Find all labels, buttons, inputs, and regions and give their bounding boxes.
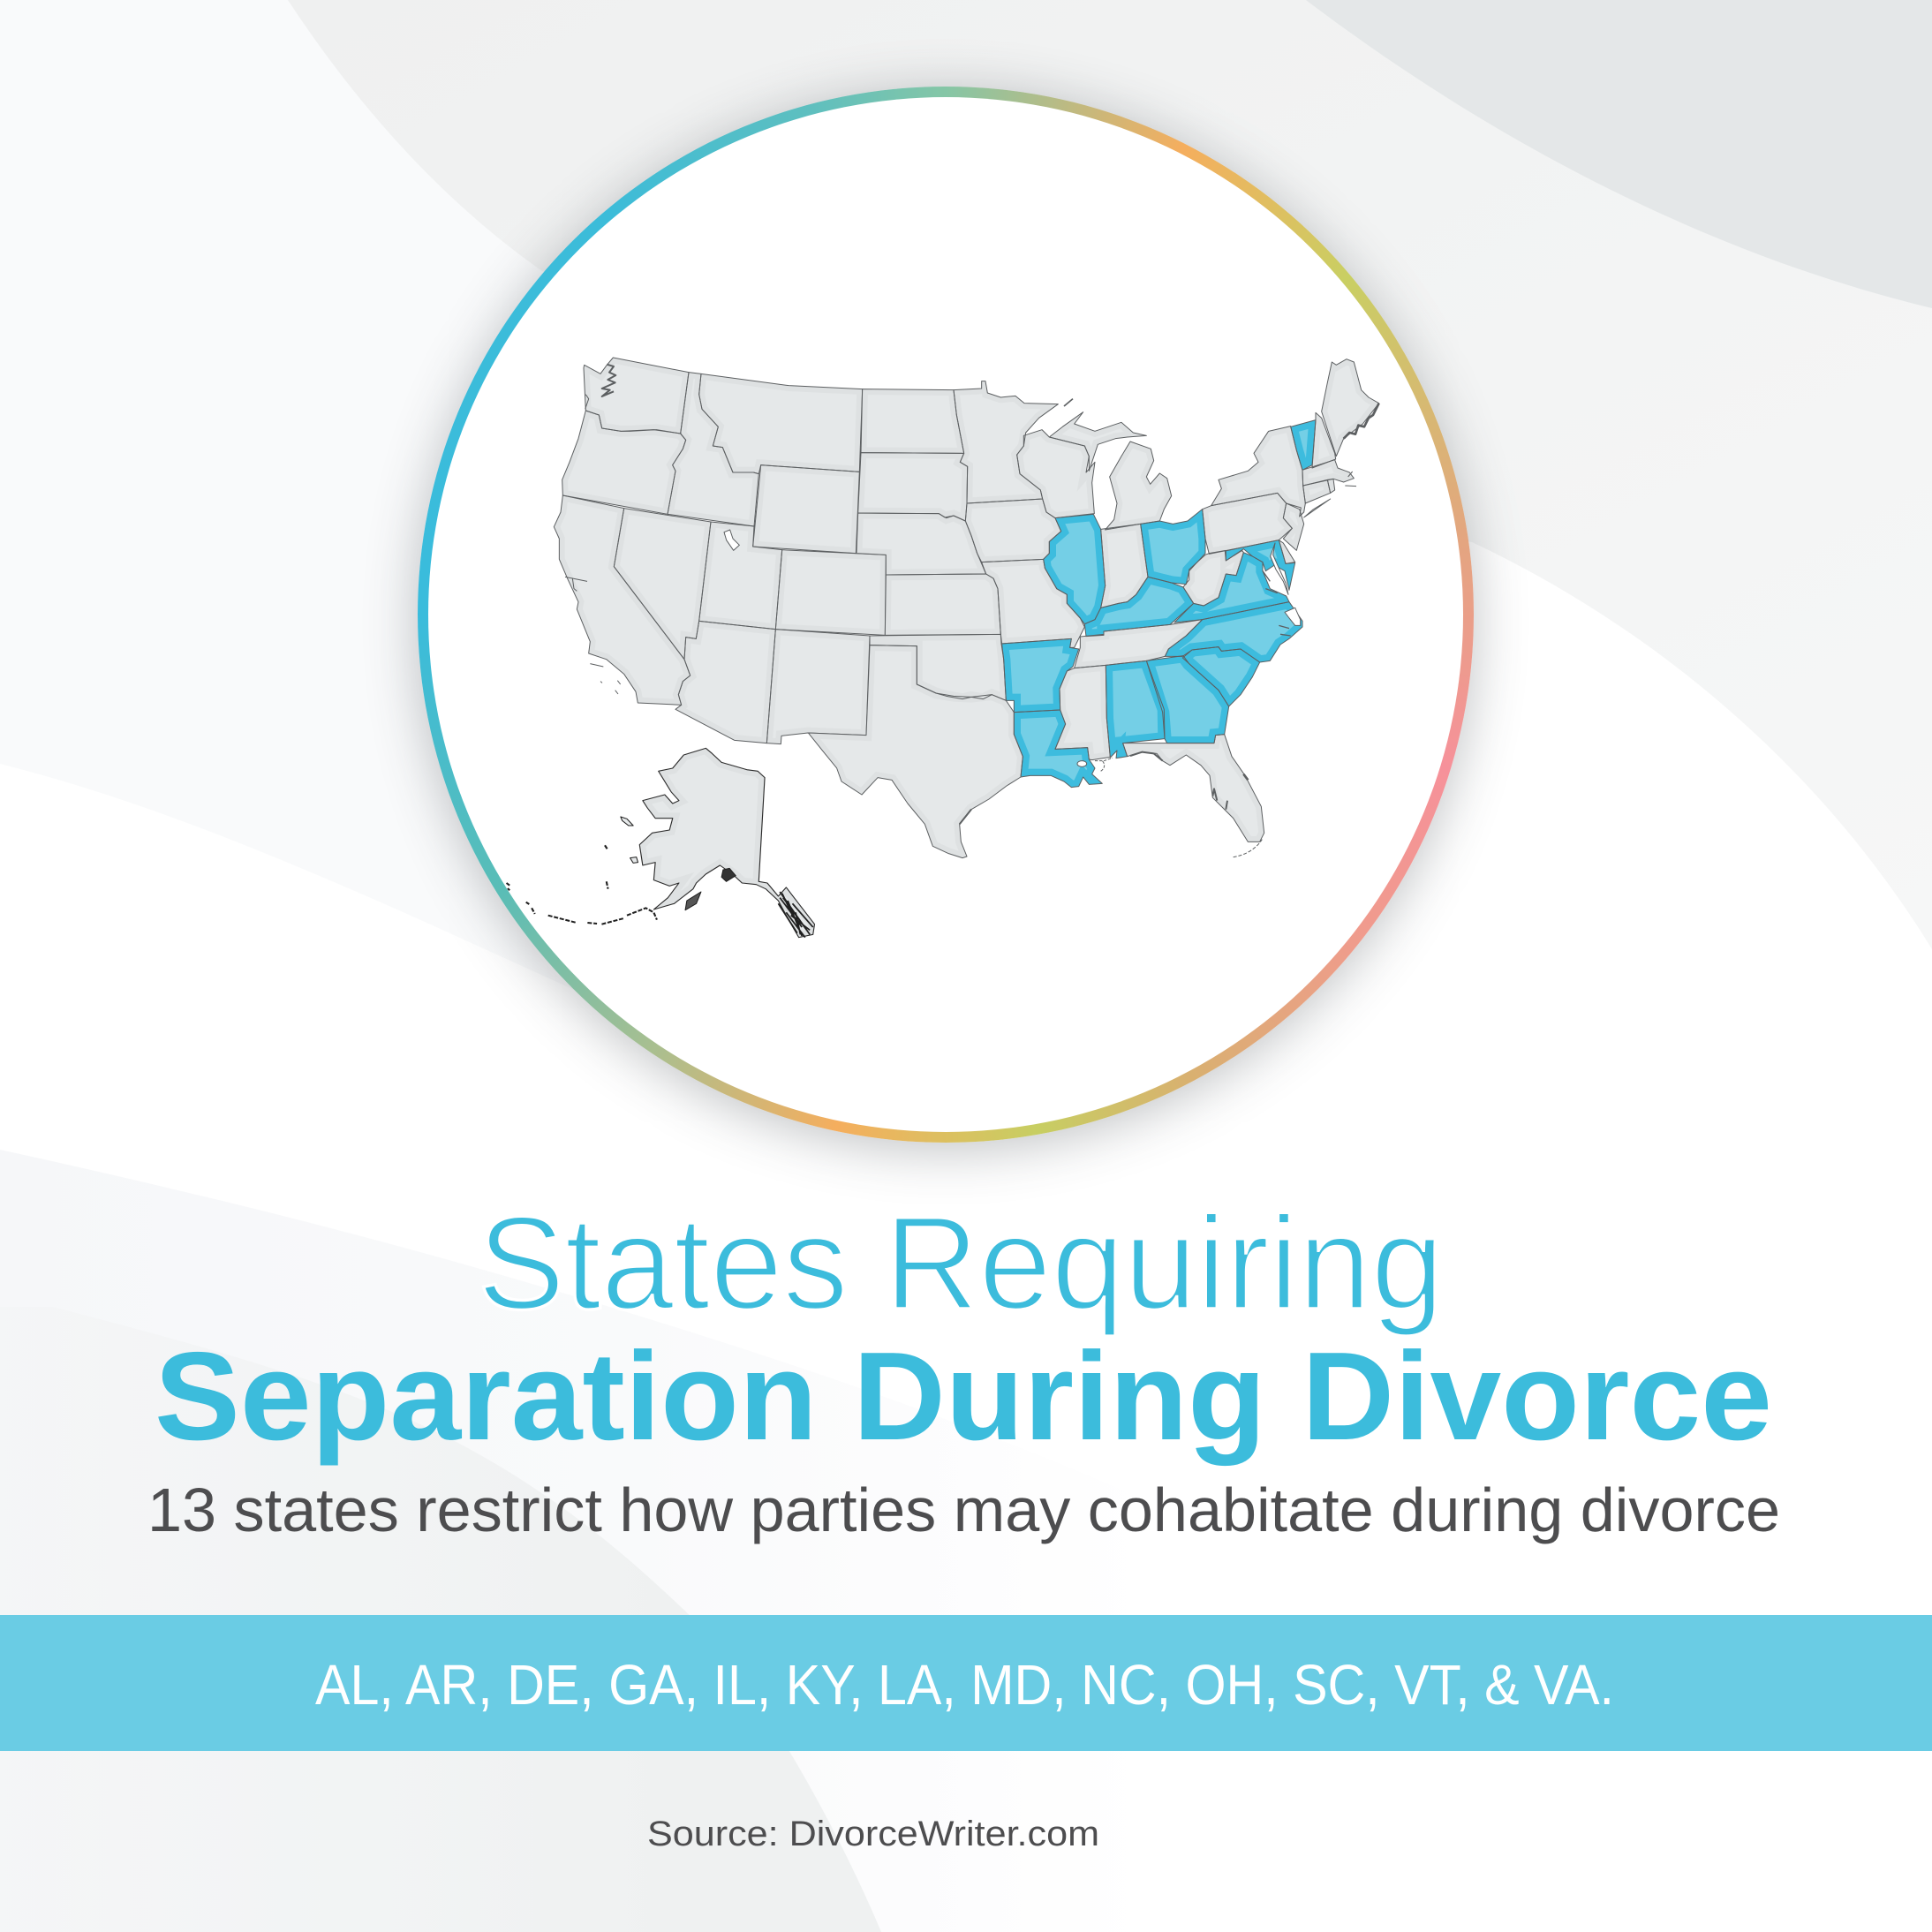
state: California <box>554 495 691 705</box>
state: Louisiana <box>1014 710 1102 788</box>
title line 1: States Requiring <box>478 1189 1444 1337</box>
subtitle: 13 states restrict how parties may cohabitate during divorce <box>147 1475 1780 1544</box>
western states <box>554 358 886 744</box>
highlighted states <box>1001 420 1316 788</box>
state: Ohio <box>1141 509 1205 585</box>
western state outlines <box>554 358 886 744</box>
eastern state outlines and coastal details <box>808 359 1379 858</box>
state: Georgia <box>1146 656 1229 743</box>
state: North Carolina <box>1165 602 1302 662</box>
central and eastern states <box>808 359 1379 858</box>
state: Oregon <box>562 411 686 514</box>
state: Illinois <box>1044 514 1106 624</box>
title line 2: Separation During Divorce <box>155 1326 1772 1467</box>
US map <box>506 357 1380 938</box>
circle panel with gradient ring <box>418 87 1474 1143</box>
source: Source: DivorceWriter.com <box>647 1815 1099 1853</box>
state: South Carolina <box>1182 647 1260 706</box>
state list band: AL, AR, DE, GA, IL, KY, LA, MD, NC, OH, SC, VT, & VA. <box>315 1653 1614 1717</box>
state: Kentucky <box>1084 577 1194 637</box>
Alaska islands and panhandle <box>507 817 813 938</box>
Alaska <box>507 748 814 938</box>
state: Nevada <box>614 509 711 660</box>
state: New Mexico <box>766 630 870 744</box>
state: Virginia <box>1174 553 1289 623</box>
state: Maryland <box>1225 540 1295 590</box>
state: Idaho <box>668 373 758 526</box>
non-highlighted states <box>808 359 1379 858</box>
state: Vermont <box>1291 420 1316 470</box>
state list band <box>0 1615 1932 1751</box>
state: Utah <box>699 522 782 630</box>
state: Arizona <box>675 621 775 743</box>
state: Washington <box>584 358 689 434</box>
state: Colorado <box>775 550 886 635</box>
state: Wyoming <box>753 465 859 554</box>
state: Alabama <box>1106 660 1165 758</box>
state: Montana <box>699 374 863 474</box>
state: Arkansas <box>1001 638 1079 713</box>
